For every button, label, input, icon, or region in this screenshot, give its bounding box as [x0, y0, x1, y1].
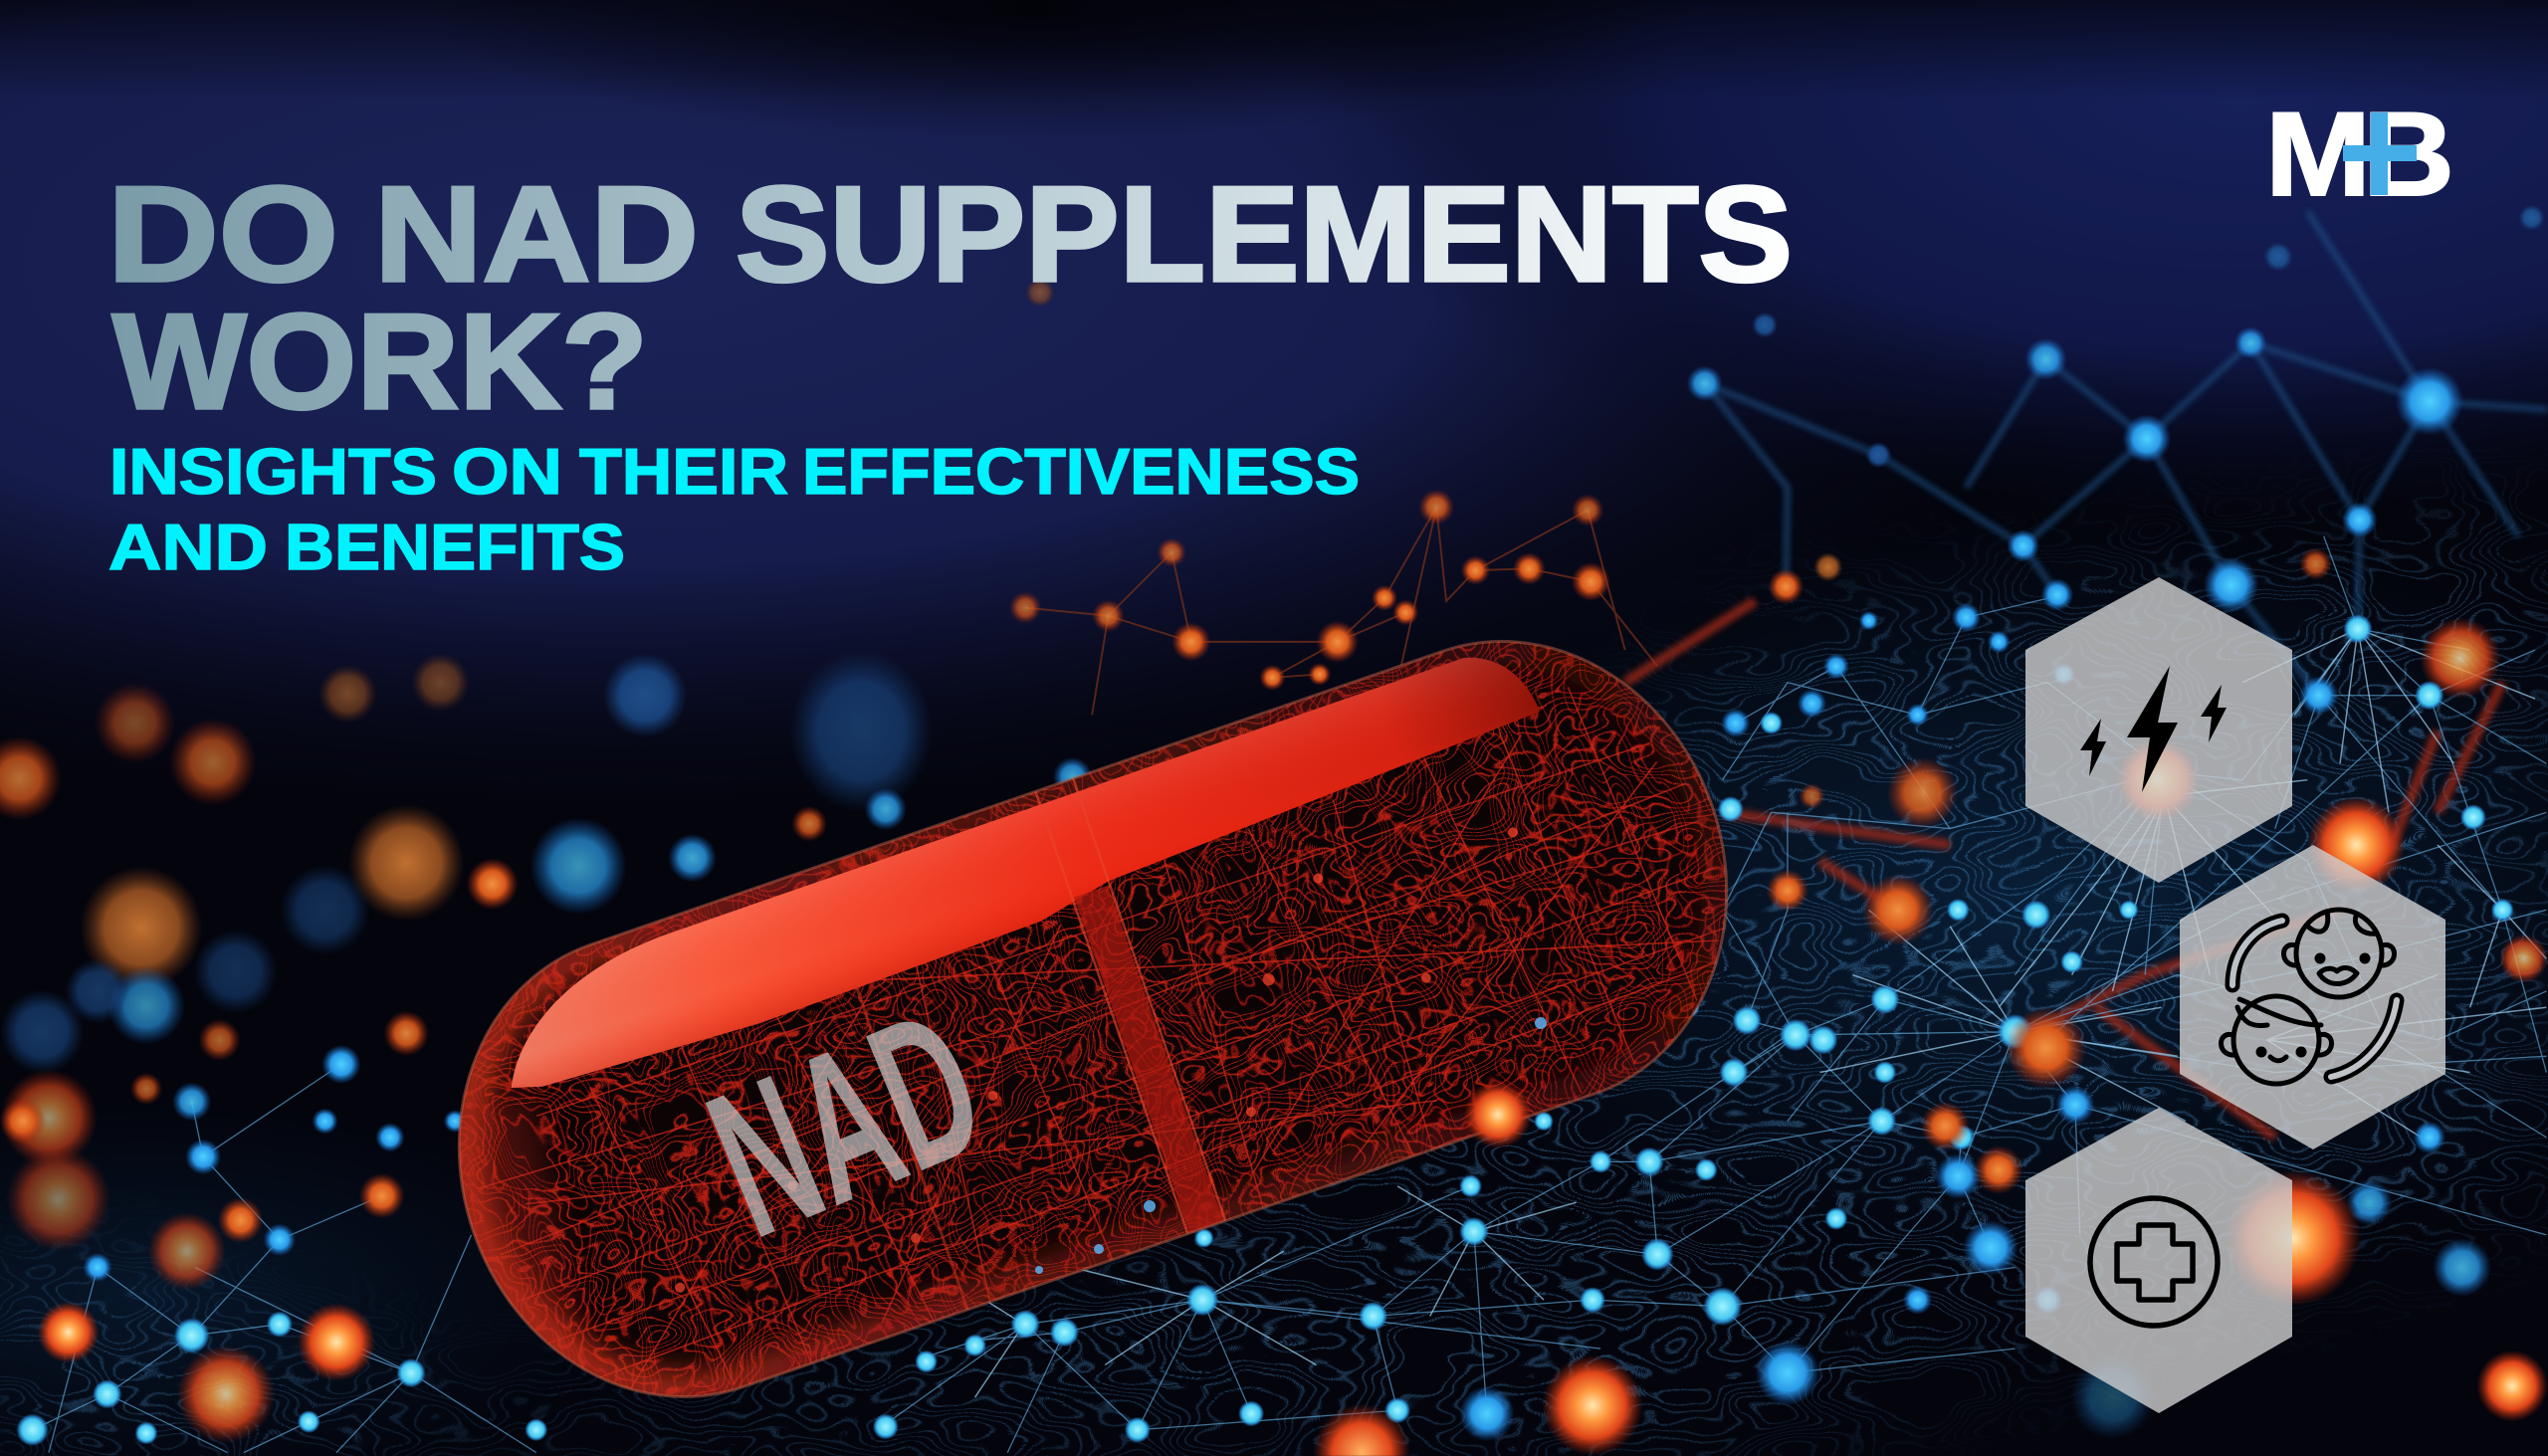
- blue glints on capsule: [1035, 1017, 1547, 1274]
- capsule highlight band: [480, 640, 1553, 1107]
- subtitle: ON: [452, 435, 562, 508]
- bokeh dots left: [0, 650, 1092, 1290]
- icon: medical cross in circle: [2090, 1198, 2218, 1326]
- red filaments second layer: [459, 641, 1727, 1397]
- orange nodes upper: [1009, 278, 1610, 691]
- highlight shading: [480, 640, 1553, 1107]
- hexagon: aging: [2180, 845, 2445, 1149]
- logo: M: [2265, 88, 2371, 221]
- capsule outline: [397, 585, 1789, 1453]
- orange links: [1025, 507, 1657, 715]
- filament hubs: [675, 827, 1518, 1293]
- icon: old and young faces with arrows: [2221, 910, 2397, 1084]
- subtitle: AND: [108, 511, 268, 583]
- NAD label: NAD: [681, 963, 1011, 1282]
- subtitle: [108, 435, 1360, 583]
- right and bottom network nodes: [873, 712, 2514, 1443]
- orange nodes right: [1313, 737, 2548, 1456]
- subtitle: BENEFITS: [285, 511, 625, 583]
- fine blue links: [33, 536, 2546, 1453]
- subtitle: INSIGHTS: [109, 435, 437, 508]
- seam lines: [1034, 774, 1227, 1238]
- title: [107, 158, 1793, 437]
- subtitle: THEIR: [579, 435, 788, 508]
- logo plus: [2343, 112, 2417, 195]
- title: NAD: [374, 158, 699, 310]
- bright blue fans: [958, 629, 2546, 1397]
- capsule interior: [459, 641, 1727, 1397]
- left shell line: [856, 987, 969, 1315]
- logo: [2265, 88, 2454, 221]
- capsule rim glow: [459, 641, 1726, 1397]
- capsule seam: [1074, 886, 1224, 1236]
- title: DO: [107, 158, 338, 310]
- bottom left dots: [16, 1108, 547, 1446]
- straight filaments: [478, 687, 1724, 1389]
- red filaments: [459, 641, 1727, 1397]
- capsule: [458, 640, 1728, 1398]
- title: WORK?: [112, 286, 648, 437]
- red streaks: [1625, 601, 2502, 1138]
- blue nodes upper right: [1687, 205, 2545, 737]
- hexagon: health: [2025, 1108, 2292, 1413]
- flare by capsule: [1464, 1081, 1532, 1148]
- upper right blurred links: [1705, 211, 2548, 696]
- hexagon: energy: [2025, 577, 2292, 883]
- title: SUPPLEMENTS: [736, 158, 1793, 310]
- capsule body: [397, 585, 1789, 1453]
- left end shading: [414, 1088, 640, 1456]
- fine network texture: [0, 448, 2548, 1456]
- logo: B: [2363, 88, 2454, 221]
- subtitle: EFFECTIVENESS: [802, 435, 1360, 508]
- icon: lightning bolts: [2080, 666, 2227, 792]
